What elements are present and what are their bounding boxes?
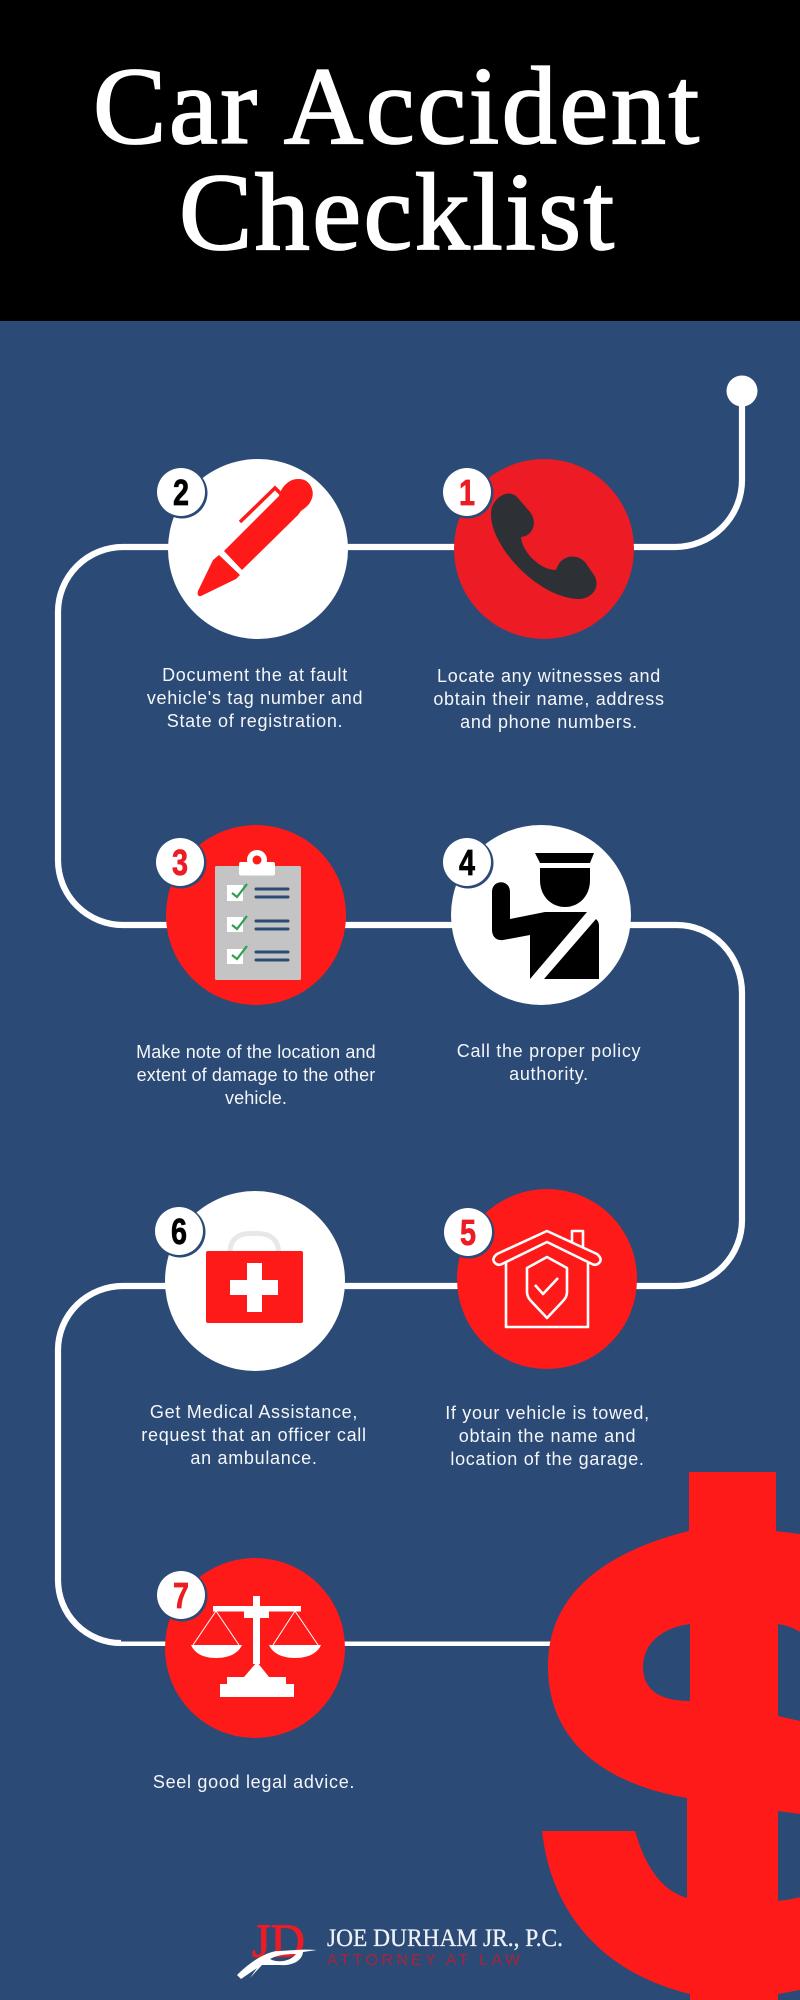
circle [168,459,348,639]
step text: Get Medical Assistance, [150,1402,358,1422]
circle [165,1191,345,1371]
icon: first aid kit [206,1234,303,1323]
title: Checklist [179,151,614,273]
badge [442,468,494,518]
circle [454,459,634,639]
badge [154,1206,206,1258]
step text: vehicle. [225,1088,287,1108]
step text: Make note of the location and [136,1042,376,1062]
step text: location of the garage. [450,1449,645,1469]
circle [451,825,631,1005]
tagline: ATTORNEY AT LAW [327,1952,521,1969]
step text: If your vehicle is towed, [445,1403,650,1423]
dollar sign [542,1472,800,2000]
step text: obtain the name and [459,1426,636,1446]
badge [156,1570,208,1622]
step text: Document the at fault [162,665,348,685]
icon: house with shield [493,1231,601,1327]
badge: 6 [171,1211,187,1252]
logo mark: swoosh [237,1950,317,1979]
badge: 1 [459,472,475,513]
icon: pen [198,479,313,596]
step text: obtain their name, address [433,689,665,709]
badge [156,838,206,888]
step 2 [147,459,363,731]
circle [165,1558,345,1738]
title [93,45,699,273]
header band [0,0,800,321]
step 5 [444,1189,650,1469]
circle [166,825,346,1005]
timeline final segment [120,1642,600,1646]
step text: Seel good legal advice. [153,1772,355,1792]
title: Car Accident [93,45,699,167]
step 6 [141,1191,367,1468]
icon: clipboard [215,850,301,980]
badge [444,1208,494,1258]
icon: police officer [492,853,599,979]
badge: 5 [460,1212,476,1253]
icon: scales of justice [191,1596,321,1697]
timeline start dot [726,376,758,406]
badge: 4 [459,842,475,883]
step 1 [433,459,665,732]
timeline path [58,391,742,1643]
icon: phone [491,493,597,599]
step 3 [136,825,376,1108]
step text: extent of damage to the other [137,1065,375,1085]
logo mark: JD monogram: JD [252,1915,305,1968]
badge: 3 [172,842,188,883]
firm name: JOE DURHAM JR., P.C. [327,1925,563,1952]
badge [442,838,494,888]
step text: Locate any witnesses and [437,666,661,686]
step 4 [442,825,641,1084]
step text: authority. [509,1064,589,1084]
step 7 [153,1558,355,1792]
step text: Call the proper policy [457,1041,641,1061]
step text: State of registration. [167,711,343,731]
logo [237,1915,563,1979]
badge [156,468,208,518]
step text: request that an officer call [141,1425,367,1445]
circle [457,1189,637,1369]
badge: 2 [173,472,189,513]
step text: vehicle's tag number and [147,688,363,708]
step text: and phone numbers. [460,712,638,732]
badge: 7 [173,1575,189,1616]
step text: an ambulance. [190,1448,318,1468]
